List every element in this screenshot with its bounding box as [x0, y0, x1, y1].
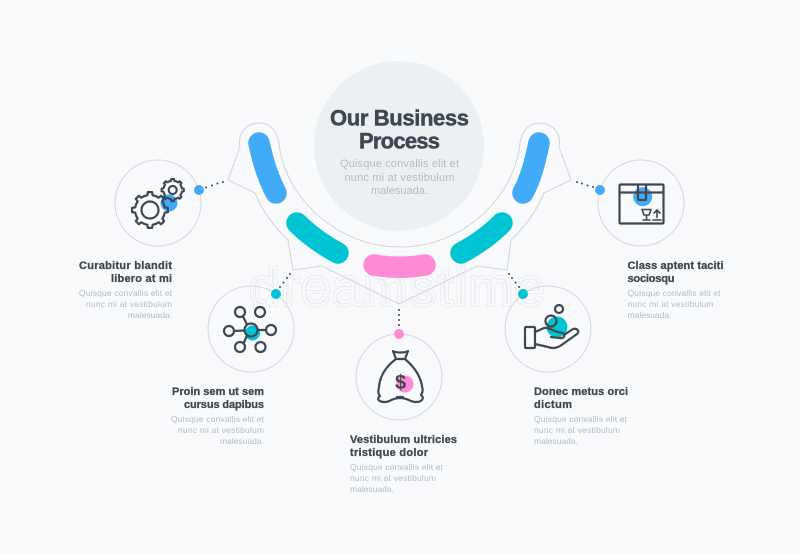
text: Class [628, 260, 724, 320]
text: Proin: Proin sem ut sem [172, 386, 264, 398]
text: Class: malesuada. [628, 310, 672, 320]
text: Donec: dictum [534, 399, 572, 411]
text: Curabitur: libero at mi [111, 273, 172, 285]
center circle with title: Our Business [330, 106, 469, 130]
text: Vestibulum [350, 434, 457, 494]
icon: money bag: $ [395, 372, 406, 394]
text: Class: nunc mi at vestibulum [628, 299, 714, 309]
center circle with title: malesuada. [371, 185, 428, 197]
text: Curabitur [79, 260, 173, 320]
center circle with title: Quisque convallis elit et [340, 158, 459, 170]
connector: hand [509, 274, 528, 299]
text: Vestibulum: tristique dolor [350, 447, 429, 459]
text: Curabitur: Quisque convallis elit et [79, 288, 173, 298]
arc outline [228, 123, 571, 304]
connector: box [577, 182, 605, 195]
icon: parcel box [598, 160, 684, 246]
connector: money [394, 310, 404, 339]
text: Class: Class aptent taciti [628, 260, 724, 272]
text: Donec: malesuada. [534, 436, 578, 446]
connector: gears [194, 182, 223, 195]
icon: hand with coins [505, 286, 591, 372]
icon: gears [115, 160, 201, 246]
text: Proin [171, 386, 265, 446]
segment: right teal [461, 223, 502, 253]
text: Proin: cursus dapibus [184, 399, 264, 411]
text: Vestibulum: Quisque convallis elit et [350, 462, 444, 472]
icon: network [208, 286, 294, 372]
center circle with title: nunc mi at vestibulum [344, 172, 454, 184]
arc segments [259, 143, 539, 267]
segment: right blue [523, 143, 539, 193]
segment: left teal [297, 223, 338, 253]
watermark: dreamstime [250, 259, 544, 317]
text: Vestibulum: nunc mi at vestibulum [350, 473, 436, 483]
segment: left blue [259, 143, 276, 193]
center circle with title [314, 61, 484, 231]
text: Vestibulum: malesuada. [350, 484, 394, 494]
text: Donec [534, 386, 628, 446]
watermark: dreamstime [250, 259, 544, 317]
text: Donec: Donec metus orci [534, 386, 628, 398]
text: Class: Quisque convallis elit et [628, 288, 721, 298]
text: Proin: Quisque convallis elit et [171, 414, 265, 424]
icon: money bag [356, 334, 442, 420]
text: Curabitur: nunc mi at vestibulum [86, 299, 172, 309]
center circle with title: Process [359, 128, 440, 154]
text: Proin: nunc mi at vestibulum [178, 425, 264, 435]
text: Donec: nunc mi at vestibulum [534, 425, 620, 435]
segment: pink [374, 265, 425, 267]
text: Curabitur: Curabitur blandit [79, 260, 172, 272]
text: Curabitur: malesuada. [128, 310, 172, 320]
text: Donec: Quisque convallis elit et [534, 414, 628, 424]
text: Class: sociosqu [628, 273, 674, 285]
text: Vestibulum: Vestibulum ultricies [350, 434, 457, 446]
connector: network [271, 274, 290, 299]
text: Proin: malesuada. [220, 436, 264, 446]
